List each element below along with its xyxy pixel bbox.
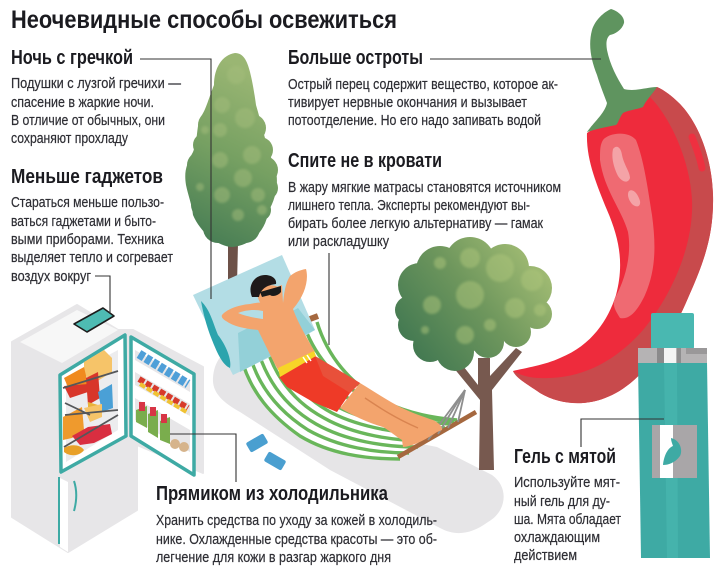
bottle label — [652, 425, 697, 478]
trunk and branches — [453, 348, 522, 470]
block: mint gel: охлаждающим — [514, 530, 600, 546]
shorts — [279, 356, 360, 412]
block: fewer gadgets: ваться гаджетами и быто- — [11, 214, 156, 230]
block: night with buckwheat: Ночь с гречкой — [11, 47, 133, 69]
right door — [131, 337, 194, 475]
leader lines — [95, 59, 664, 482]
shorts light panel — [315, 356, 360, 393]
shorts strings — [303, 355, 311, 363]
door cans and bottles — [136, 354, 189, 452]
hair — [250, 275, 276, 297]
block: more spice: Острый перец содержит вещество, которое ак- — [288, 77, 558, 93]
block: night with buckwheat — [11, 47, 181, 147]
bottle light bands — [664, 362, 678, 558]
handle — [74, 481, 76, 511]
fridge — [12, 305, 203, 552]
block: straight from fridge — [156, 483, 437, 566]
block: mint gel: действием — [514, 548, 577, 564]
crown — [395, 237, 552, 371]
block: straight from fridge: легчение для кожи в разгар жаркого дня — [156, 550, 391, 566]
block: fewer gadgets: воздух вокруг — [11, 269, 91, 285]
phone — [74, 308, 114, 332]
title: Неочевидные способы освежиться — [11, 6, 397, 34]
crown — [185, 53, 278, 247]
block: mint gel: ный гель для ду- — [514, 494, 610, 510]
head bar — [310, 316, 318, 319]
block: fewer gadgets — [11, 166, 173, 285]
block: fewer gadgets: выделяет тепло и согревает — [11, 250, 173, 266]
left tree — [185, 53, 278, 285]
legs — [340, 383, 442, 447]
bottle collar — [638, 348, 707, 363]
block: mint gel: Используйте мят- — [514, 475, 620, 491]
block: night with buckwheat: сохраняют прохладу — [11, 131, 129, 147]
pillow — [193, 255, 315, 375]
block: sleep not in bed — [288, 150, 561, 250]
man in hammock — [222, 269, 442, 447]
hammock cloth — [243, 322, 457, 459]
block: sleep not in bed: или раскладушку — [288, 234, 390, 250]
waistband — [278, 351, 316, 377]
block: sleep not in bed: Спите не в кровати — [288, 150, 442, 172]
leg shadow — [365, 398, 418, 428]
cans on the ground — [246, 433, 286, 471]
trunk — [228, 243, 238, 285]
block: mint gel: Гель с мятой — [514, 446, 616, 468]
pepper glints — [612, 147, 640, 206]
block: sleep not in bed: лишнего тепла. Эксперты рекомендуют вы- — [288, 198, 530, 214]
fridge top — [20, 310, 118, 363]
bottle cap — [651, 313, 694, 349]
block: sleep not in bed: бирать более легкую альтернативу — гамак — [288, 216, 544, 232]
left compartment — [60, 335, 126, 472]
hammock — [243, 316, 476, 459]
block: fewer gadgets: Меньше гаджетов — [11, 166, 163, 188]
door trim — [58, 477, 60, 544]
pepper dark stripe — [692, 137, 702, 168]
block: mint gel: ша. Мята обладает — [514, 512, 621, 528]
wire shelves — [63, 371, 118, 447]
gel bottle — [638, 313, 710, 558]
pepper highlight — [600, 134, 654, 318]
sunglasses — [260, 286, 281, 297]
block: night with buckwheat: В отличие от обычных, они — [11, 113, 165, 129]
pepper stem — [587, 9, 657, 132]
block: more spice: Больше остроты — [288, 47, 423, 69]
right tree — [395, 237, 552, 470]
lower door strip — [60, 478, 68, 552]
block: mint gel — [514, 446, 621, 564]
block: straight from fridge: Прямиком из холодильника — [156, 483, 389, 505]
ground shadow under hammock — [213, 345, 504, 533]
forearm gap — [238, 310, 263, 319]
chili pepper — [513, 9, 713, 403]
foot bar — [398, 412, 476, 457]
block: more spice: тивирует нервные окончания и вызывает — [288, 95, 527, 111]
ropes — [428, 390, 465, 440]
fridge body — [12, 305, 203, 552]
block: more spice: потоотделение. Но его надо запивать водой — [288, 113, 541, 129]
foliage clumps — [196, 66, 267, 221]
bottle body — [638, 362, 710, 558]
door shelf shading — [135, 350, 190, 452]
pillow edge — [201, 301, 230, 368]
block: straight from fridge: Хранить средства по уходу за кожей в холодиль- — [156, 513, 437, 529]
head — [258, 285, 281, 310]
pepper shaded side — [513, 87, 713, 403]
foliage clumps — [421, 248, 546, 344]
block: fewer gadgets: выми приборами. Техника — [11, 232, 165, 248]
shelves food — [63, 350, 118, 462]
block: more spice — [288, 47, 558, 129]
pepper body — [513, 87, 713, 403]
body and arms — [222, 269, 315, 370]
block: sleep not in bed: В жару мягкие матрасы становятся источником — [288, 180, 561, 196]
block: night with buckwheat: Подушки с лузгой гречихи — — [11, 76, 181, 92]
hammock stripes — [243, 322, 457, 459]
block: night with buckwheat: спасение в жаркие ночи. — [11, 95, 154, 111]
block: fewer gadgets: Стараться меньше пользо- — [11, 195, 164, 211]
block: straight from fridge: нике. Охлажденные средства красоты — это об- — [156, 532, 437, 548]
